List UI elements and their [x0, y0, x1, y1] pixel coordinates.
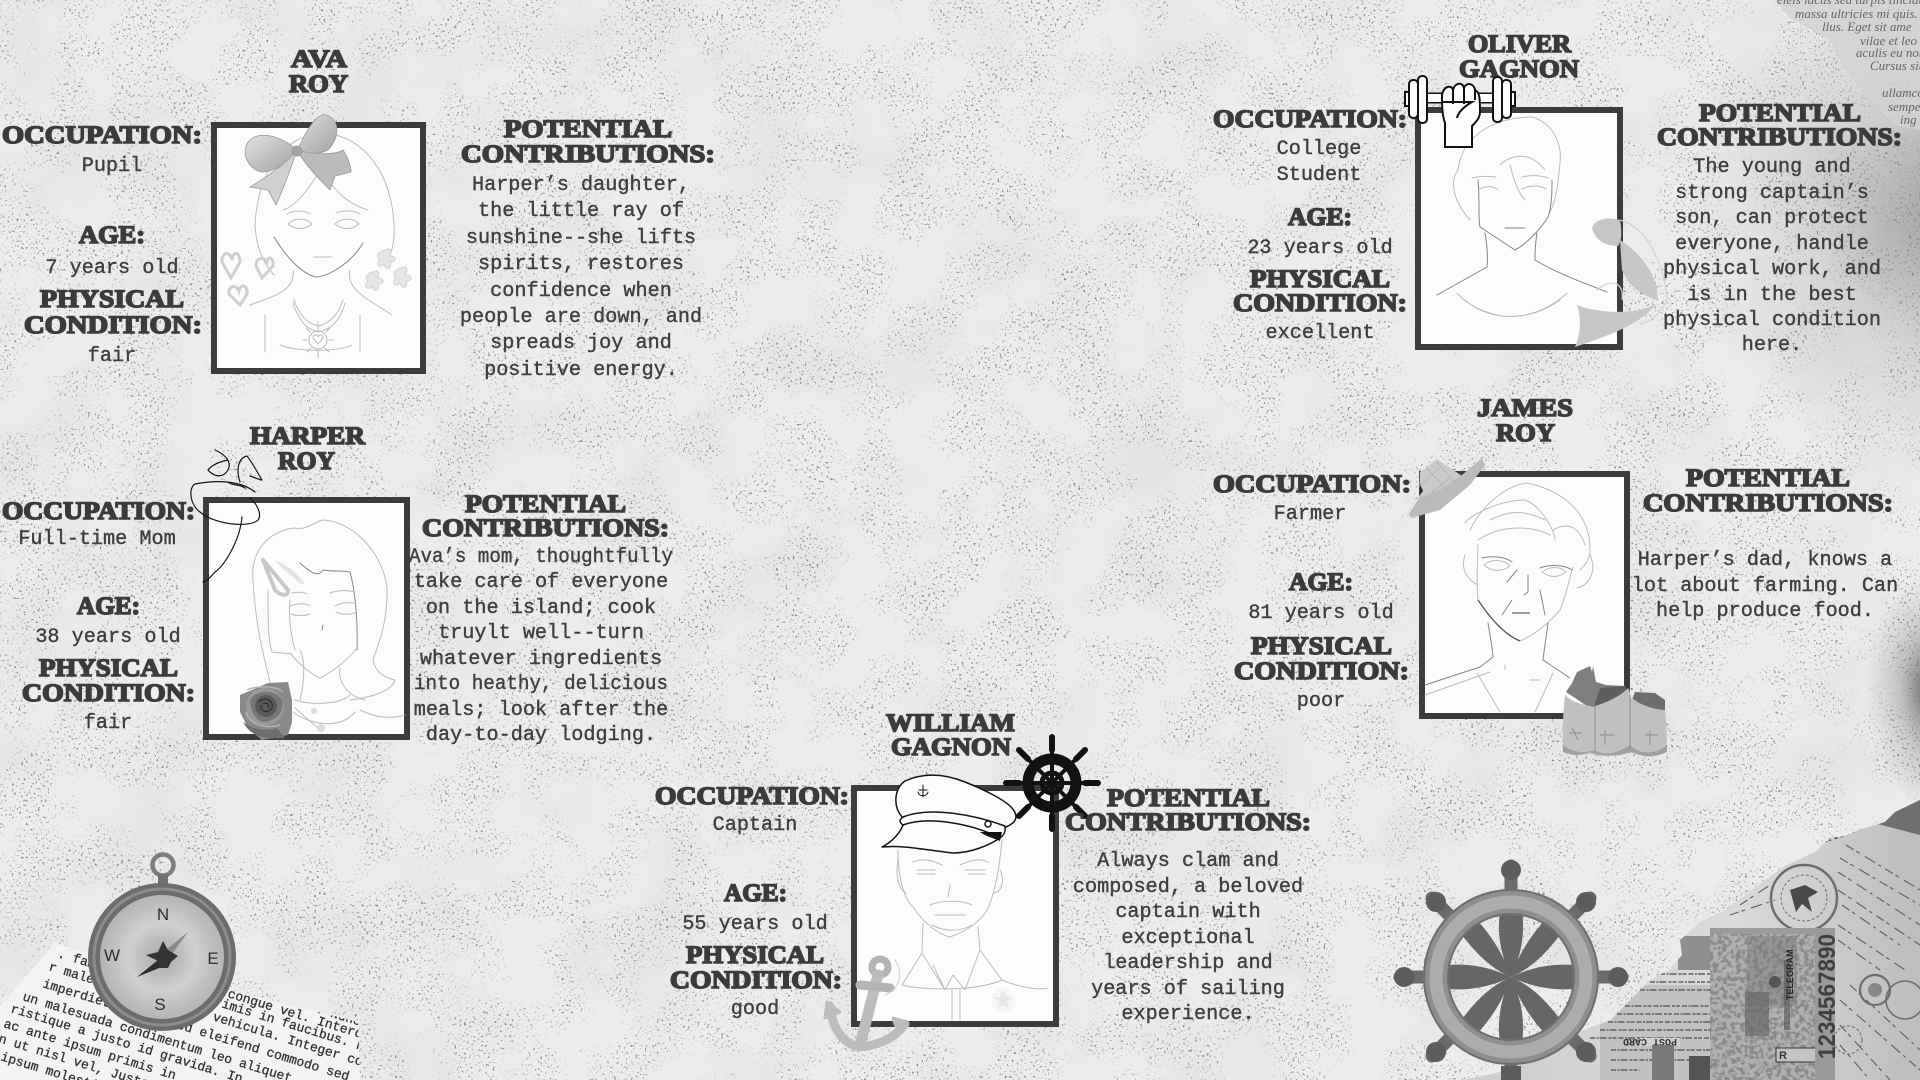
portrait frame: James	[1409, 458, 1667, 756]
name: Harper Roy: ROY	[278, 448, 335, 475]
potential contributions: James: help produce food.	[1656, 600, 1874, 623]
physical condition: William: good	[731, 998, 779, 1021]
occupation: William: OCCUPATION:	[655, 783, 849, 810]
icon: dumbbell with fist	[1405, 76, 1515, 147]
occupation: James: Farmer	[1274, 503, 1346, 526]
potential contributions: Harper	[409, 491, 673, 747]
occupation: Harper: Full-time Mom	[18, 528, 176, 551]
printed postcard text	[1590, 936, 1713, 1080]
handwriting and postmarks	[1730, 822, 1920, 1080]
icon: straw hat	[1409, 458, 1485, 518]
icon: star badge	[991, 988, 1015, 1012]
physical condition: Oliver: PHYSICAL	[1250, 266, 1390, 293]
physical condition: Ava: CONDITION:	[24, 312, 202, 339]
name: Harper Roy: HARPER	[250, 423, 366, 450]
potential contributions: Ava: Harper’s daughter,	[472, 174, 690, 197]
printed postcard text: POST CARD	[1623, 1035, 1677, 1046]
physical condition: Oliver: excellent	[1265, 322, 1375, 345]
occupation: Harper	[2, 498, 195, 551]
physical condition: James: CONDITION:	[1234, 658, 1409, 685]
icon: black ship wheel	[1006, 737, 1098, 829]
name: James Roy	[1477, 395, 1573, 447]
name: Harper Roy	[250, 423, 366, 475]
physical condition: Harper	[22, 655, 195, 735]
age: James	[1248, 569, 1394, 625]
physical condition: William: PHYSICAL	[686, 942, 824, 969]
name: Oliver Gagnon: GAGNON	[1459, 56, 1579, 83]
potential contributions: Oliver: CONTRIBUTIONS:	[1657, 124, 1902, 151]
potential contributions: Ava: POTENTIAL	[504, 116, 672, 143]
potential contributions: Harper: Ava’s mom, thoughtfully	[409, 546, 673, 569]
occupation: Oliver	[1213, 106, 1407, 187]
age: William	[682, 880, 828, 936]
occupation: James: OCCUPATION:	[1213, 471, 1411, 498]
name: William Gagnon: WILLIAM	[886, 710, 1015, 737]
profile: Oliver Gagnon	[1213, 31, 1902, 357]
age: Oliver	[1247, 204, 1393, 260]
icon: compass	[88, 854, 236, 1031]
typewritten paper scrap, bottom left: . fames ac turpis a primis in faucibus. Fusce	[56, 946, 396, 1063]
potential contributions: Oliver	[1657, 100, 1902, 357]
top-right torn page with italic print	[1775, 0, 1920, 130]
typewritten paper scrap, bottom left: r malesuada in. Donec vehicula. Integer commodo	[47, 959, 402, 1080]
occupation: William: Captain	[713, 814, 797, 837]
icon: compass: N	[157, 905, 169, 924]
age: Ava: 7 years old	[45, 257, 179, 280]
name: William Gagnon: GAGNON	[891, 734, 1011, 761]
physical condition: Oliver: CONDITION:	[1233, 290, 1407, 317]
age: Oliver: 23 years old	[1247, 237, 1393, 260]
icon: sun-heart pendant	[303, 322, 333, 358]
age: Harper: 38 years old	[35, 626, 181, 649]
stamp block with number strip: TELEGRAM	[1785, 950, 1795, 1000]
occupation: James	[1213, 471, 1411, 526]
icon: large ship wheel	[1394, 860, 1628, 1080]
potential contributions: Harper: meals; look after the	[414, 699, 668, 722]
stamp block with number strip	[1710, 928, 1841, 1080]
physical condition: Ava: fair	[88, 345, 136, 368]
potential contributions: Ava: confidence when	[490, 280, 672, 303]
potential contributions: Ava: the little ray of	[478, 200, 684, 223]
age: James: 81 years old	[1248, 602, 1394, 625]
profile: Harper Roy	[2, 423, 673, 747]
potential contributions: William: composed, a beloved	[1073, 876, 1303, 899]
potential contributions: Oliver: strong captain’s	[1675, 182, 1869, 205]
icon: hair clip	[263, 560, 305, 595]
profile: Ava Roy	[2, 46, 715, 382]
potential contributions: William	[1065, 785, 1311, 1026]
potential contributions: Harper: truylt well--turn	[438, 622, 644, 645]
potential contributions: Oliver: is in the best	[1687, 284, 1857, 307]
potential contributions: Oliver: physical condition	[1663, 309, 1881, 332]
potential contributions: William: captain with	[1115, 901, 1261, 924]
potential contributions: James: Harper’s dad, knows a	[1638, 549, 1892, 572]
name: Oliver Gagnon: OLIVER	[1468, 31, 1572, 58]
occupation: Ava: OCCUPATION:	[2, 122, 202, 149]
potential contributions: William: exceptional	[1121, 927, 1255, 950]
icon: compass: E	[207, 949, 219, 968]
potential contributions: William: years of sailing	[1091, 978, 1285, 1001]
potential contributions: Harper: CONTRIBUTIONS:	[422, 515, 669, 542]
potential contributions: Ava: spreads joy and	[490, 332, 672, 355]
occupation: Oliver: College	[1277, 138, 1361, 161]
potential contributions: William: leadership and	[1103, 952, 1273, 975]
stamp block with number strip: 1234567890	[1814, 934, 1841, 1059]
icon: ribbon bow	[245, 115, 351, 205]
age: Harper: AGE:	[77, 593, 140, 620]
name: James Roy: JAMES	[1477, 395, 1573, 422]
icon: compass: W	[104, 946, 120, 965]
potential contributions: Harper: day-to-day lodging.	[426, 724, 656, 747]
potential contributions: Oliver: everyone, handle	[1675, 233, 1869, 256]
potential contributions: Harper: into heathy, delicious	[414, 673, 668, 696]
potential contributions: Ava: spirits, restores	[478, 253, 684, 276]
profile: James Roy	[1213, 395, 1898, 756]
profile: William Gagnon	[655, 710, 1311, 1047]
icon: hearts	[222, 253, 273, 305]
torn postcard collage, bottom right	[1460, 795, 1920, 1080]
icon: rose	[240, 682, 292, 740]
physical condition: Harper: fair	[84, 712, 132, 735]
potential contributions: William: experience.	[1121, 1003, 1255, 1026]
icon: captain hat	[882, 775, 1016, 853]
name: Ava Roy	[289, 46, 348, 98]
potential contributions: William: Always clam and	[1097, 850, 1279, 873]
icon: produce sacks	[1563, 666, 1667, 756]
potential contributions: Harper: whatever ingredients	[420, 648, 662, 671]
potential contributions: Harper: POTENTIAL	[465, 491, 626, 518]
physical condition: William: CONDITION:	[670, 967, 842, 994]
potential contributions: Ava: positive energy.	[484, 359, 678, 382]
potential contributions: Harper: on the island; cook	[426, 597, 656, 620]
potential contributions: James	[1632, 465, 1898, 623]
potential contributions: James: CONTRIBUTIONS:	[1643, 490, 1893, 517]
physical condition: Harper: PHYSICAL	[39, 655, 178, 682]
age: James: AGE:	[1289, 569, 1353, 596]
age: William: 55 years old	[682, 913, 828, 936]
name: Ava Roy: ROY	[289, 71, 348, 98]
icon: flowers	[366, 249, 411, 290]
occupation: William	[655, 783, 849, 837]
icon: flexed arm	[1575, 219, 1667, 347]
portrait frame: Harper	[191, 450, 407, 740]
portrait frame: Ava	[214, 115, 423, 371]
potential contributions: Ava: CONTRIBUTIONS:	[461, 141, 715, 168]
typewritten paper scrap, bottom left: . Nunc	[314, 1001, 363, 1030]
potential contributions: Oliver: The young and	[1693, 156, 1851, 179]
potential contributions: William: CONTRIBUTIONS:	[1065, 809, 1311, 836]
physical condition: Ava	[24, 286, 202, 368]
potential contributions: Oliver: physical work, and	[1663, 258, 1881, 281]
potential contributions: Ava: sunshine--she lifts	[466, 227, 696, 250]
potential contributions: Ava	[460, 116, 715, 382]
occupation: Harper: OCCUPATION:	[2, 498, 195, 525]
potential contributions: James: POTENTIAL	[1686, 465, 1850, 492]
potential contributions: James: lot about farming. Can	[1632, 575, 1898, 598]
age: Ava: AGE:	[79, 222, 145, 249]
name: James Roy: ROY	[1496, 420, 1555, 447]
occupation: Ava: Pupil	[82, 155, 142, 178]
stamp block with number strip: R	[1779, 1050, 1787, 1062]
age: Oliver: AGE:	[1288, 204, 1352, 231]
age: Harper	[35, 593, 181, 649]
top-right torn page with italic print: llus. Eget sit ame	[1822, 19, 1912, 34]
potential contributions: Oliver: POTENTIAL	[1699, 100, 1861, 127]
portrait frame: William	[825, 737, 1098, 1047]
typewritten paper scrap, bottom left: congue vel. Interdum	[226, 986, 380, 1047]
potential contributions: Harper: take care of everyone	[414, 571, 668, 594]
name: William Gagnon	[886, 710, 1015, 761]
potential contributions: Ava: people are down, and	[460, 306, 702, 329]
occupation: Ava	[2, 122, 202, 178]
physical condition: Ava: PHYSICAL	[40, 286, 184, 313]
potential contributions: Oliver: son, can protect	[1675, 207, 1869, 230]
icon: compass: S	[154, 995, 166, 1014]
physical condition: Oliver	[1233, 266, 1407, 345]
icon: butterfly and flourish	[191, 450, 262, 582]
physical condition: William	[670, 942, 842, 1021]
occupation: Oliver: OCCUPATION:	[1213, 106, 1407, 133]
physical condition: Harper: CONDITION:	[22, 680, 195, 707]
physical condition: James: PHYSICAL	[1251, 633, 1392, 660]
physical condition: James	[1234, 633, 1409, 713]
age: Ava	[45, 222, 179, 280]
icon: anchor	[825, 959, 907, 1047]
typewritten paper scrap, bottom left	[0, 944, 360, 1080]
potential contributions: Oliver: here.	[1742, 334, 1802, 357]
name: Ava Roy: AVA	[291, 46, 347, 73]
portrait frame: Oliver	[1405, 76, 1667, 347]
occupation: Oliver: Student	[1277, 164, 1361, 187]
physical condition: James: poor	[1297, 690, 1345, 713]
age: William: AGE:	[724, 880, 787, 907]
name: Oliver Gagnon	[1459, 31, 1579, 83]
potential contributions: William: POTENTIAL	[1107, 785, 1270, 812]
handwriting and postmarks: BRAIN	[1805, 822, 1857, 852]
